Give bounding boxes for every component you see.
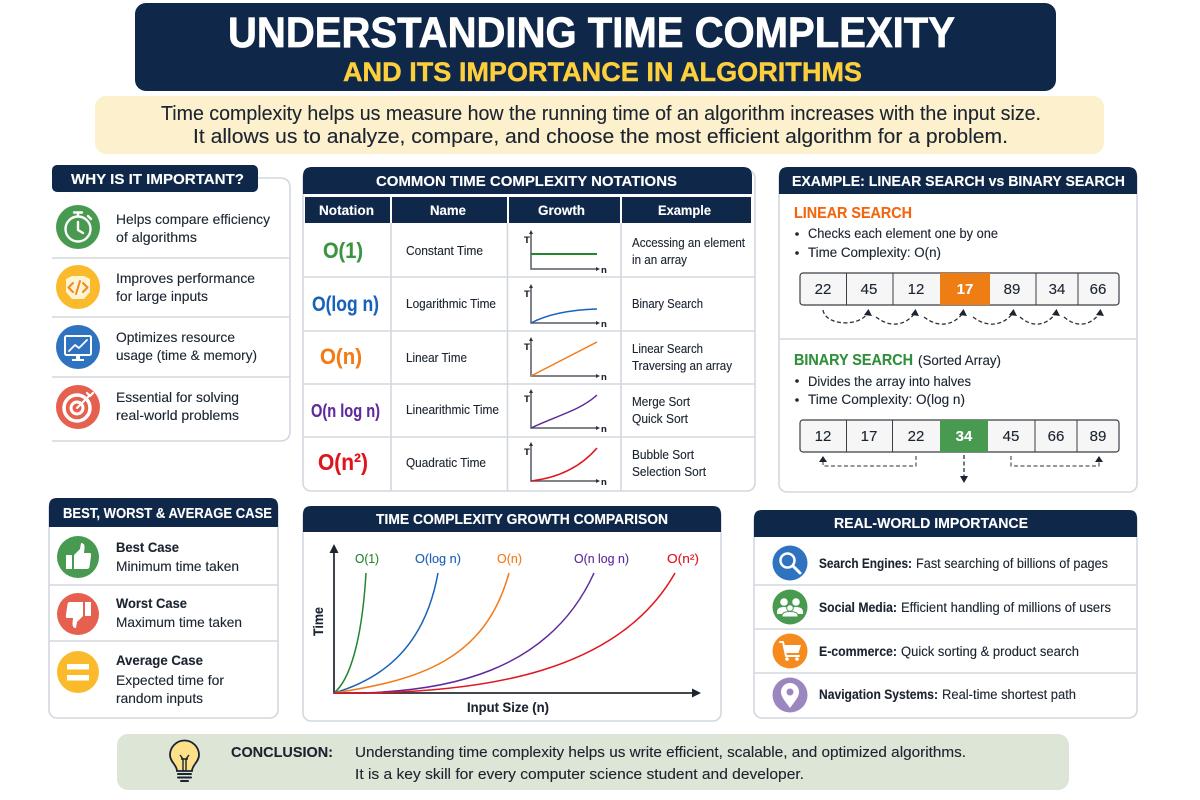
linear search array: 17	[957, 281, 973, 298]
linear search array: 12	[908, 281, 924, 298]
chart: logarithmic	[524, 284, 607, 330]
table header row: Notation	[319, 202, 374, 218]
text: resource usage	[116, 329, 257, 363]
row: O(1): O(1)	[323, 238, 363, 263]
panel: real-world importance	[754, 510, 1137, 718]
heading: cases: BEST, WORST & AVERAGE CASE	[63, 506, 272, 522]
icon: people	[772, 590, 808, 624]
icon: equals	[57, 651, 99, 693]
binary search description: Divides the array into halves	[808, 374, 971, 389]
chart: linear: n	[601, 372, 607, 383]
text: search engines: Search Engines:	[819, 556, 912, 571]
row: O(n): Linear Search	[632, 342, 703, 356]
text: e-commerce: Quick sorting & product search	[901, 644, 1079, 659]
heading: cases	[49, 498, 278, 527]
icon: target	[56, 385, 100, 429]
row: O(n²): Selection Sort	[632, 465, 706, 479]
row: O(log n): Binary Search	[632, 297, 703, 311]
row: O(1): Constant Time	[406, 244, 483, 258]
panel: growth comparison	[303, 506, 721, 721]
heading: notations: COMMON TIME COMPLEXITY NOTATIONS	[376, 173, 677, 190]
linear search description: Checks each element one by one	[808, 226, 998, 241]
conclusion text	[231, 744, 966, 783]
text: e-commerce	[819, 644, 1079, 659]
heading: growth comparison	[303, 506, 721, 532]
line chart: growth curves: O(n log n)	[574, 551, 629, 566]
intro text block: It allows us to analyze, compare, and choose the most efficient algorithm for a problem.	[193, 126, 1008, 148]
text: e-commerce: E-commerce:	[819, 644, 897, 659]
linear search description: Time Complexity: O(n)	[808, 245, 941, 260]
text: best case: Minimum time taken	[116, 558, 239, 574]
panel: why is it important	[52, 165, 290, 441]
panel: notations table	[303, 167, 755, 491]
panel: best, worst and average case	[49, 498, 278, 718]
text: average case	[116, 652, 224, 706]
row: O(1)	[323, 230, 745, 276]
linear search array: 89	[1004, 281, 1020, 298]
table header row: Name	[430, 202, 466, 218]
line chart: growth curves: O(n)	[497, 551, 522, 566]
row: O(n): Traversing an array	[632, 359, 733, 373]
line chart: growth curves: O(log n)	[415, 551, 461, 566]
panel: linear vs binary search example	[779, 167, 1137, 492]
title: UNDERSTANDING TIME COMPLEXITY	[228, 9, 955, 57]
heading: real-world importance	[754, 510, 1137, 537]
table header row: Example	[658, 202, 711, 218]
icon: thumbs up	[57, 536, 99, 578]
row: O(log n): O(log n)	[312, 293, 379, 316]
linear search description: LINEAR SEARCH	[794, 205, 912, 222]
binary search array: 22	[908, 428, 924, 445]
linear search description	[794, 205, 998, 260]
row: O(n)	[320, 337, 733, 383]
chart: logarithmic: T	[524, 289, 530, 300]
row: O(n): O(n)	[320, 344, 362, 369]
binary search array: 12	[815, 428, 831, 445]
text: compare efficiency: of algorithms	[116, 229, 197, 245]
row: O(n log n): Quick Sort	[632, 412, 688, 426]
heading: growth comparison: TIME COMPLEXITY GROWTH COMPARISON	[376, 512, 668, 528]
row: O(n log n): Linearithmic Time	[406, 403, 499, 417]
line chart: growth curves: Time	[310, 607, 326, 636]
conclusion text: Understanding time complexity helps us write efficient, scalable, and optimized algorithms.	[355, 744, 966, 761]
text: best case: Best Case	[116, 539, 179, 555]
text: navigation systems: Navigation Systems:	[819, 687, 938, 702]
icon: code	[56, 265, 100, 309]
chart: quadratic	[524, 442, 607, 488]
icon: light bulb	[170, 740, 199, 781]
text: performance: for large inputs	[116, 288, 208, 304]
linear search arrows	[823, 309, 1104, 324]
text: best case	[116, 539, 239, 574]
chart: constant	[524, 230, 607, 276]
binary search description: (Sorted Array)	[918, 353, 1001, 368]
binary search description: Time Complexity: O(log n)	[808, 392, 965, 407]
icon: magnifier	[772, 546, 808, 580]
chart: linearithmic	[524, 389, 607, 435]
text: real-world problems: Essential for solving	[116, 389, 239, 405]
text: average case: random inputs	[116, 690, 203, 706]
text: real-world problems: real-world problems	[116, 407, 239, 423]
heading: why is it important	[52, 165, 258, 192]
callout: conclusion	[117, 734, 1069, 790]
text: performance	[116, 270, 255, 304]
heading: notations	[303, 167, 752, 194]
row: O(n²): O(n²)	[318, 449, 368, 475]
icon: cart	[772, 634, 808, 668]
heading: example	[779, 167, 1137, 194]
intro text block	[95, 96, 1104, 154]
heading: real-world importance: REAL-WORLD IMPORTANCE	[834, 516, 1028, 532]
icon: thumbs down	[57, 593, 99, 635]
icon: monitor	[56, 325, 100, 369]
row: O(n log n)	[311, 389, 690, 435]
table header row: Growth	[538, 202, 585, 218]
row: O(1): Accessing an element	[632, 236, 745, 250]
intro text block: Time complexity helps us measure how the running time of an algorithm increases with the input size.	[161, 103, 1041, 125]
table header row	[305, 197, 751, 223]
row: O(n²): Quadratic Time	[406, 456, 486, 470]
text: social media: Social Media:	[819, 600, 897, 615]
chart: quadratic: n	[601, 477, 607, 488]
binary search array	[800, 420, 1119, 452]
subtitle: AND ITS IMPORTANCE IN ALGORITHMS	[343, 57, 862, 87]
binary search array: 17	[861, 428, 877, 445]
line chart: growth curves: Input Size (n)	[467, 699, 549, 715]
text: navigation systems	[819, 687, 1076, 702]
binary search arrows	[819, 455, 1103, 483]
icon: stopwatch	[56, 205, 100, 249]
linear search array: 66	[1090, 281, 1106, 298]
chart: linearithmic: n	[601, 424, 607, 435]
text: performance: Improves performance	[116, 270, 255, 286]
linear search array	[800, 273, 1119, 305]
text: average case: Average Case	[116, 652, 203, 668]
binary search description	[794, 352, 1001, 407]
title banner	[135, 3, 1056, 91]
linear search array: 45	[861, 281, 877, 298]
text: worst case: Maximum time taken	[116, 614, 242, 630]
row: O(n²)	[318, 442, 706, 488]
line chart: growth curves	[310, 544, 701, 715]
text: compare efficiency	[116, 211, 270, 245]
row: O(n log n): O(n log n)	[311, 401, 380, 421]
text: worst case: Worst Case	[116, 595, 187, 611]
binary search array: 66	[1048, 428, 1064, 445]
row: O(n²): Bubble Sort	[632, 448, 694, 462]
chart: linear	[524, 337, 607, 383]
row: O(log n): Logarithmic Time	[406, 297, 496, 311]
linear search array: 22	[815, 281, 831, 298]
heading: why is it important: WHY IS IT IMPORTANT?	[71, 172, 244, 188]
text: search engines: Fast searching of billions of pages	[916, 556, 1108, 571]
text: resource usage: Optimizes resource	[116, 329, 235, 345]
text: average case: Expected time for	[116, 672, 224, 688]
chart: linear: T	[524, 342, 530, 353]
text: social media: Efficient handling of millions of users	[901, 600, 1111, 615]
text: compare efficiency: Helps compare efficiency	[116, 211, 270, 227]
binary search description: BINARY SEARCH	[794, 352, 913, 369]
chart: constant: T	[524, 235, 530, 246]
text: real-world problems	[116, 389, 239, 423]
row: O(log n)	[312, 284, 703, 330]
conclusion text: It is a key skill for every computer science student and developer.	[355, 766, 804, 783]
text: worst case	[116, 595, 242, 630]
row: O(n): Linear Time	[406, 351, 467, 365]
linear search array: 34	[1049, 281, 1065, 298]
icon: map pin	[772, 678, 808, 712]
conclusion text: CONCLUSION:	[231, 744, 333, 761]
chart: logarithmic: n	[601, 319, 607, 330]
text: resource usage: usage (time & memory)	[116, 347, 257, 363]
text: navigation systems: Real-time shortest path	[942, 687, 1076, 702]
row: O(n log n): Merge Sort	[632, 395, 690, 409]
text: search engines	[819, 556, 1108, 571]
row: O(1): in an array	[632, 253, 688, 267]
binary search array: 45	[1003, 428, 1019, 445]
line chart: growth curves: O(n²)	[667, 551, 699, 566]
chart: quadratic: T	[524, 447, 530, 458]
heading: example: EXAMPLE: LINEAR SEARCH vs BINARY SEARCH	[792, 173, 1125, 190]
chart: constant: n	[601, 265, 607, 276]
line chart: growth curves: O(1)	[355, 551, 379, 566]
chart: linearithmic: T	[524, 394, 530, 405]
binary search array: 34	[956, 428, 973, 445]
binary search array: 89	[1090, 428, 1106, 445]
